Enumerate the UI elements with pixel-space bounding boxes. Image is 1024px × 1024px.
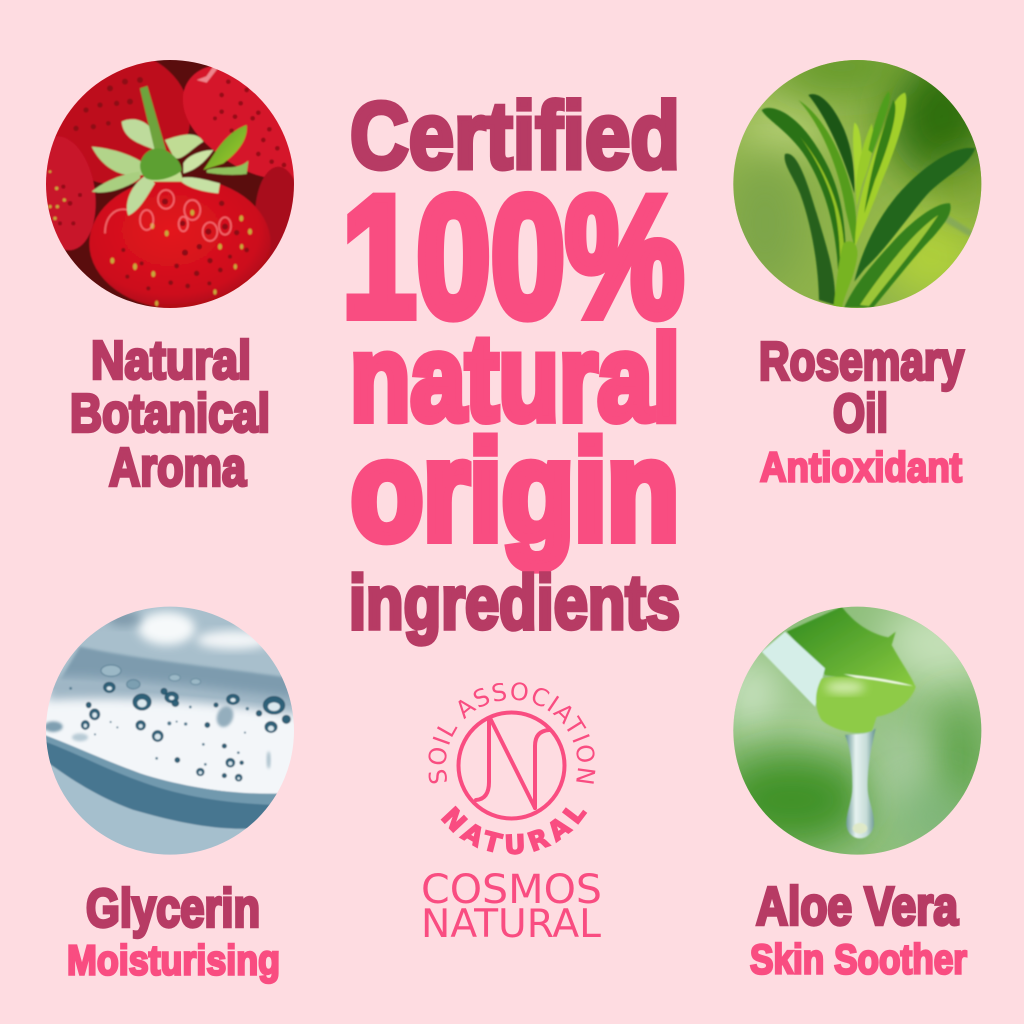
label: Rosemary Oil Antioxidant: Rosemary — [759, 332, 964, 392]
seal ring with N mark — [458, 712, 564, 818]
logo: Soil Association Natural seal — [428, 682, 596, 855]
label: Glycerin Moisturising: Glycerin — [86, 878, 260, 938]
aloe leaf — [762, 607, 916, 838]
heading: Certified: Certified — [350, 83, 680, 189]
photo: aloe vera — [733, 606, 982, 855]
label: Aloe Vera Skin Soother: Aloe Vera — [756, 876, 959, 936]
label: Rosemary Oil Antioxidant — [759, 332, 964, 490]
heading: ingredients: ingredients — [349, 560, 680, 646]
heading: origin: origin — [351, 412, 679, 569]
calyx leaves — [92, 119, 248, 216]
logo text: COSMOS NATURAL — [421, 867, 602, 947]
label: Natural Botanical Aroma: Natural — [91, 330, 251, 390]
gel drop — [845, 728, 876, 838]
heading: natural: natural — [350, 310, 680, 446]
logo text: COSMOS NATURAL: NATURAL — [421, 902, 601, 947]
photo: glycerin gel — [46, 606, 294, 855]
bubbles — [81, 665, 290, 781]
logo text: COSMOS NATURAL: COSMOS — [421, 867, 602, 913]
photo: rosemary — [733, 60, 982, 308]
heading: 100%: 100% — [342, 161, 684, 353]
seal text: SOIL ASSOCIATION: SOIL ASSOCIATION — [428, 682, 596, 784]
label: Aloe Vera Skin Soother — [750, 876, 967, 982]
highlights — [105, 190, 231, 241]
photo: strawberries — [46, 60, 294, 308]
seeds main — [121, 199, 249, 290]
label: Glycerin Moisturising — [67, 878, 280, 984]
label: Natural Botanical Aroma: Botanical — [70, 384, 270, 444]
seal text: NATURAL: NATURAL — [440, 806, 588, 855]
label: Natural Botanical Aroma — [70, 330, 270, 498]
leaves — [762, 92, 975, 307]
label: Rosemary Oil Antioxidant: Oil — [833, 384, 888, 444]
label: Aloe Vera Skin Soother: Skin Soother — [750, 936, 967, 982]
label: Natural Botanical Aroma: Aroma — [109, 438, 247, 498]
label: Glycerin Moisturising: Moisturising — [67, 936, 280, 984]
title block — [342, 83, 684, 646]
label: Rosemary Oil Antioxidant: Antioxidant — [760, 444, 962, 490]
